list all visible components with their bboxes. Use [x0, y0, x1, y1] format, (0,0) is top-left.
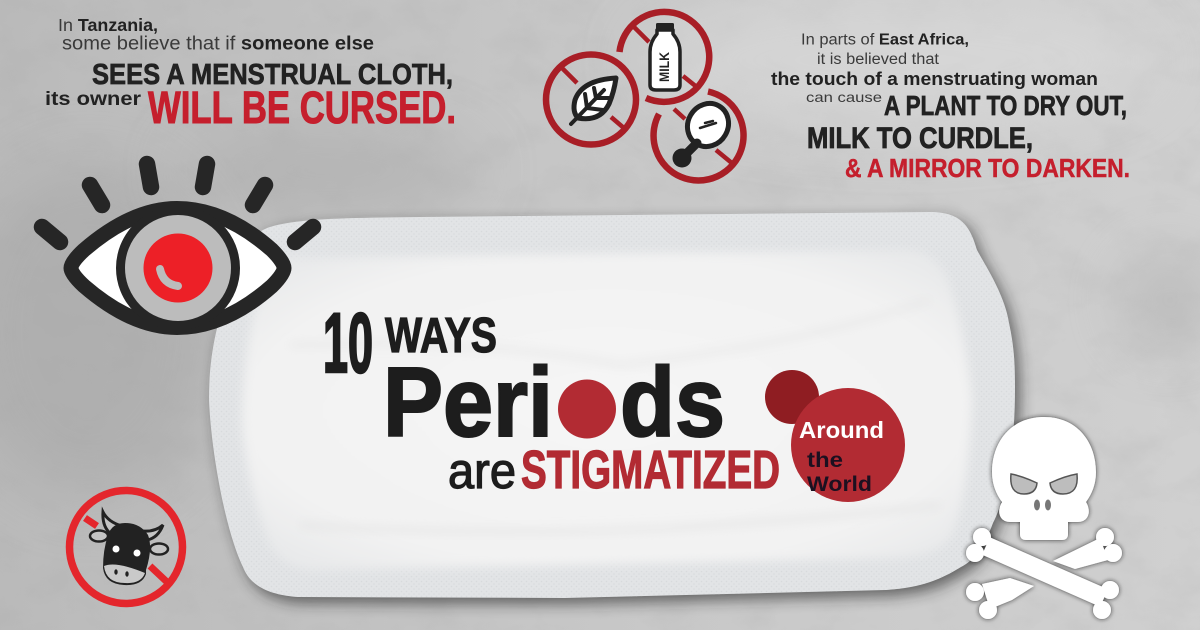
icon: no milk: MILK — [656, 52, 672, 82]
text: Tanzania belief: WILL BE CURSED. — [148, 82, 456, 133]
text: Tanzania belief: some believe that if someone else — [62, 34, 374, 54]
title: 10 ways periods are stigmatized — [323, 296, 780, 500]
badge: around the world: the — [807, 449, 843, 472]
text: Tanzania belief: In Tanzania, — [58, 15, 158, 35]
icon: eye — [42, 164, 313, 328]
icon: no plant — [546, 54, 636, 144]
icon: skull and crossbones — [966, 417, 1122, 619]
text: East Africa belief: it is believed that — [817, 51, 940, 68]
icon: cow prohibited — [70, 490, 182, 604]
skull eyes — [1011, 474, 1037, 494]
pad absorbent core — [242, 250, 972, 570]
text: Tanzania belief: its owner — [45, 89, 142, 110]
text: East Africa belief: In parts of East Africa, — [801, 32, 969, 48]
text: East Africa belief: the touch of a menstruating woman — [771, 68, 1098, 89]
title: 10 ways periods are stigmatized: Peri — [383, 347, 553, 457]
badge: around the world — [765, 370, 905, 502]
title: 10 ways periods are stigmatized: are — [448, 443, 516, 499]
text: East Africa belief: can cause — [806, 89, 882, 105]
icon group: plant, milk and mirror prohibited — [546, 12, 744, 180]
bones — [966, 528, 1122, 619]
red dot letter o — [558, 380, 616, 438]
eyelashes — [42, 164, 313, 242]
title: 10 ways periods are stigmatized: ds — [620, 347, 725, 457]
badge: around the world: World — [807, 473, 872, 496]
badge: around the world: Around — [799, 417, 884, 443]
title: 10 ways periods are stigmatized: 10 — [323, 296, 373, 390]
text: East Africa belief: & A MIRROR TO DARKEN. — [845, 153, 1130, 183]
text: East Africa belief: A PLANT TO DRY OUT, — [884, 90, 1127, 121]
text: Tanzania belief: SEES A MENSTRUAL CLOTH, — [92, 59, 453, 91]
icon: no milk — [620, 12, 709, 102]
text: East Africa belief: MILK TO CURDLE, — [807, 122, 1033, 155]
text: East Africa belief — [771, 32, 1130, 183]
sanitary pad — [209, 212, 1020, 604]
text: Tanzania belief — [45, 15, 456, 133]
title: 10 ways periods are stigmatized: STIGMATIZED — [521, 440, 780, 500]
title: 10 ways periods are stigmatized: WAYS — [385, 309, 497, 363]
icon: no mirror — [654, 92, 744, 180]
